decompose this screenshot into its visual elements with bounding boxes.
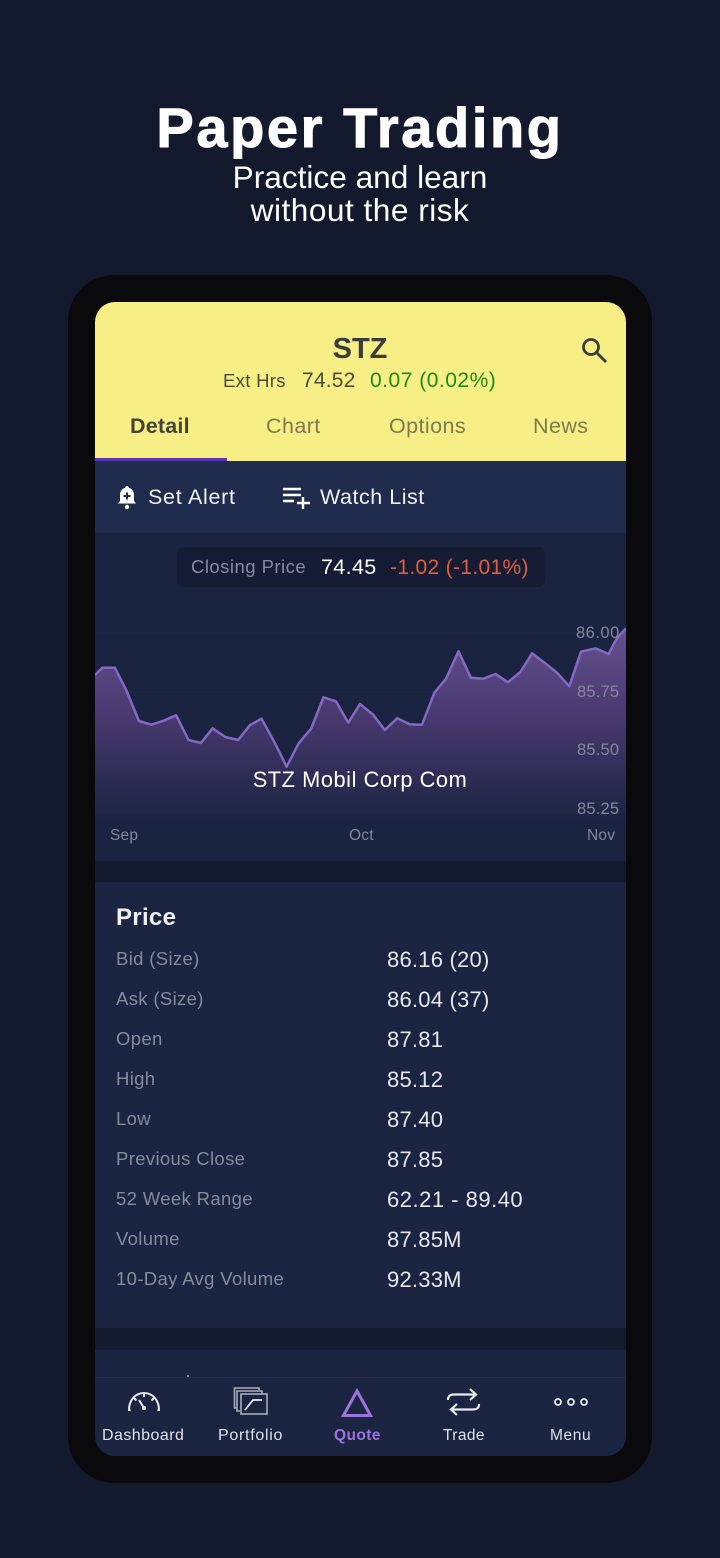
row: bid: 86.16 (20) [387, 947, 490, 972]
panel: action bar [95, 461, 626, 533]
panel: price [95, 882, 626, 1328]
nav border [95, 1377, 626, 1378]
nav label: Dashboard: Dashboard [102, 1427, 184, 1444]
row: high [116, 1067, 443, 1092]
row: 52 week range: 52 Week Range [116, 1188, 253, 1209]
nav label: Portfolio: Portfolio [218, 1427, 283, 1444]
row: low: 87.40 [387, 1107, 443, 1132]
tab: Chart: Chart [266, 414, 321, 438]
extended hours label: Ext Hrs [223, 370, 286, 391]
row: high: High [116, 1068, 155, 1089]
axis label 86.00: 86.00 [576, 624, 620, 642]
row: 10-day average volume: 10-Day Avg Volume [116, 1268, 284, 1289]
row: 10-day average volume [116, 1267, 462, 1292]
row: previous close [116, 1147, 443, 1172]
tab: Options: Options [389, 414, 466, 438]
closing price change: -1.02 (-1.01%) [390, 556, 529, 579]
row: previous close: 87.85 [387, 1147, 443, 1172]
row: previous close: Previous Close [116, 1148, 245, 1169]
phone frame [68, 275, 652, 1483]
price heading: Price [116, 904, 176, 931]
closing price label: Closing Price [191, 556, 306, 577]
section divider [95, 1328, 626, 1350]
axis label Oct: Oct [349, 827, 374, 844]
row: volume: 87.85M [387, 1227, 462, 1252]
row: 52 week range: 62.21 - 89.40 [387, 1187, 523, 1212]
title: Paper Trading [156, 96, 564, 159]
ticker: STZ [333, 333, 387, 365]
axis label 85.75: 85.75 [577, 683, 619, 701]
row: low [116, 1107, 443, 1132]
icon: search [582, 338, 607, 363]
subtitle [233, 159, 487, 228]
row: high: 85.12 [387, 1067, 443, 1092]
icon: quote triangle [341, 1388, 373, 1417]
closing price value: 74.45 [321, 555, 377, 579]
phone screen [95, 302, 626, 1456]
nav label: Trade: Trade [443, 1427, 485, 1444]
subtitle: Practice and learn [233, 159, 487, 195]
row: open: 87.81 [387, 1027, 443, 1052]
subtitle: without the risk [251, 192, 469, 228]
row: volume: Volume [116, 1228, 180, 1249]
chart name: STZ Mobil Corp Com [253, 767, 467, 792]
nav label: Menu: Menu [550, 1427, 591, 1444]
active tab underline [95, 458, 227, 461]
panel: chart area [95, 533, 626, 861]
axis label Nov: Nov [587, 827, 615, 844]
row: bid [116, 947, 490, 972]
nav label: Quote: Quote [334, 1427, 381, 1444]
panel: bottom navigation [95, 1350, 626, 1456]
panel: quote header [95, 302, 626, 461]
axis label Sep: Sep [110, 827, 138, 844]
row: open [116, 1027, 443, 1052]
row: 10-day average volume: 92.33M [387, 1267, 462, 1292]
section divider [95, 861, 626, 882]
icon: dashboard gauge [128, 1392, 160, 1411]
tab: News: News [533, 414, 588, 438]
row: volume [116, 1227, 462, 1252]
icon: portfolio [234, 1387, 268, 1415]
row: ask [116, 987, 490, 1012]
clipped text fragment [187, 1375, 189, 1377]
set alert label: Set Alert [148, 485, 236, 509]
axis label 85.25: 85.25 [577, 800, 619, 818]
row: ask: 86.04 (37) [387, 987, 490, 1012]
watch list label: Watch List [320, 485, 425, 509]
icon: menu dots [554, 1398, 588, 1406]
tab: Detail: Detail [130, 414, 190, 438]
extended hours change: 0.07 (0.02%) [370, 369, 496, 392]
axis label 85.50: 85.50 [577, 741, 619, 759]
row: ask: Ask (Size) [116, 988, 204, 1009]
extended hours price: 74.52 [302, 369, 356, 392]
closing price pill [177, 547, 545, 587]
row: low: Low [116, 1108, 151, 1129]
row: bid: Bid (Size) [116, 948, 200, 969]
icon: bell [118, 486, 136, 510]
icon: watch list [283, 488, 310, 509]
row: 52 week range [116, 1187, 523, 1212]
area chart [95, 628, 626, 806]
row: open: Open [116, 1028, 163, 1049]
icon: trade arrows [446, 1388, 480, 1416]
